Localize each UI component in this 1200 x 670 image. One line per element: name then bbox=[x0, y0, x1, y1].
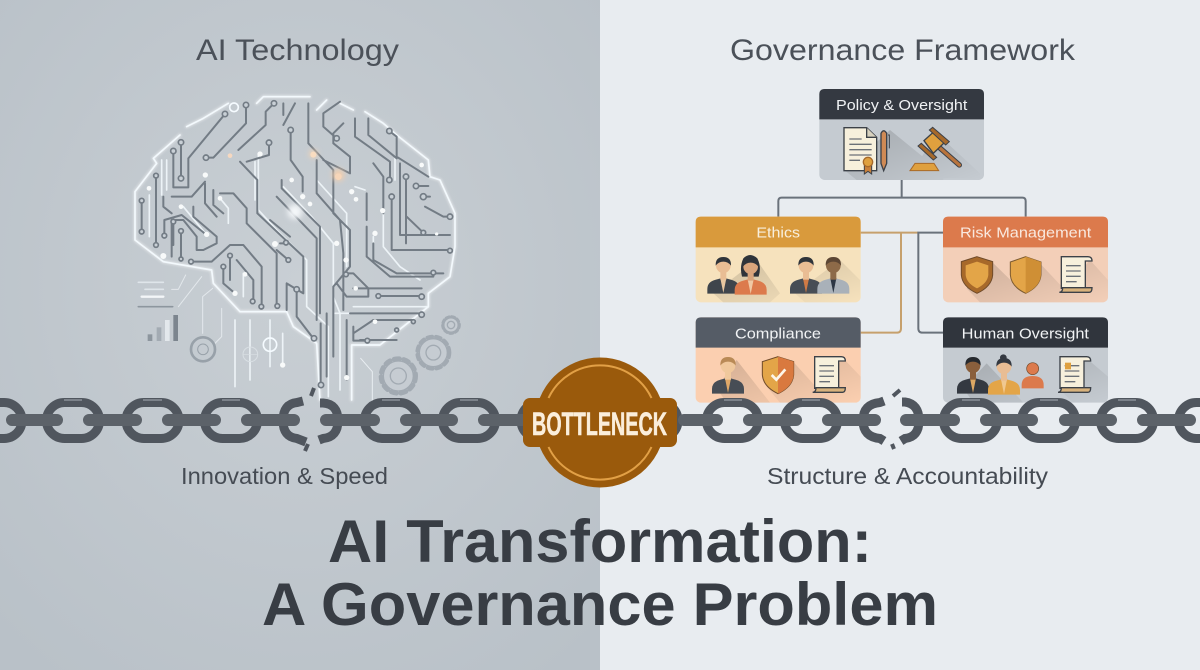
right background panel bbox=[600, 0, 1200, 670]
icon: shield solid bbox=[1010, 257, 1041, 293]
target circle icon bbox=[191, 337, 215, 361]
icon shadow bbox=[717, 358, 861, 403]
icon: shield outlined bbox=[961, 257, 993, 293]
icon: gavel bbox=[910, 127, 959, 171]
brain outline glow bbox=[135, 97, 455, 400]
governance org chart bbox=[696, 89, 1108, 403]
icon: pen bbox=[881, 131, 889, 171]
bright nodes bbox=[147, 151, 438, 380]
white light traces bbox=[149, 155, 428, 397]
caption: Structure & Accountability: Structure & Accountability bbox=[767, 463, 1049, 489]
gear icons bbox=[361, 317, 459, 400]
box: Ethics: Ethics bbox=[756, 226, 800, 242]
badge label: BOTTLENECK bbox=[532, 406, 667, 442]
icon: person in suit bbox=[712, 357, 744, 394]
icon: shield with check bbox=[762, 357, 794, 394]
caption: Innovation & Speed: Innovation & Speed bbox=[181, 463, 388, 489]
box: Human Oversight: Human Oversight bbox=[962, 326, 1089, 342]
broken link left bbox=[283, 388, 338, 451]
badge circle bbox=[535, 358, 665, 488]
broken link right bbox=[863, 390, 919, 449]
data lines icon bbox=[138, 275, 222, 345]
icon: scroll bbox=[813, 357, 845, 392]
small bar chart icon bbox=[148, 315, 178, 341]
connector lines bbox=[778, 180, 1026, 333]
dark circuit traces bbox=[142, 102, 450, 385]
box: Policy & Oversight bbox=[819, 89, 984, 180]
icon: profile scroll bbox=[1058, 357, 1091, 392]
box: Human Oversight bbox=[943, 317, 1108, 403]
box: Compliance: Compliance bbox=[735, 326, 821, 342]
main title bbox=[262, 508, 938, 638]
box: Compliance bbox=[696, 317, 861, 403]
heading: AI Technology: AI Technology bbox=[196, 34, 399, 67]
icon shadow bbox=[967, 260, 1108, 302]
box: Risk Management bbox=[943, 217, 1108, 302]
chain links bbox=[0, 402, 1200, 438]
icon shadow bbox=[845, 130, 980, 180]
chain bars bbox=[12, 414, 1190, 426]
left background panel bbox=[0, 0, 600, 670]
icon shadow bbox=[713, 260, 860, 302]
icon: scroll bbox=[1059, 257, 1092, 292]
circuit nodes bbox=[139, 101, 453, 388]
title line 1: AI Transformation: bbox=[328, 508, 872, 575]
box: Risk Management: Risk Management bbox=[960, 226, 1091, 242]
brain outline bbox=[135, 97, 455, 400]
box: Ethics bbox=[696, 217, 861, 302]
circuit brain illustration bbox=[135, 97, 459, 400]
glowing spots bbox=[288, 150, 344, 219]
top white ring bbox=[230, 103, 238, 112]
icon: three people bbox=[957, 354, 1044, 395]
badge band bbox=[523, 398, 677, 447]
link highlights bbox=[64, 399, 1136, 401]
icon: two men bbox=[790, 257, 849, 294]
bottleneck badge bbox=[523, 358, 677, 488]
chain bbox=[0, 388, 1200, 451]
box: Policy & Oversight: Policy & Oversight bbox=[836, 98, 967, 114]
icon: certificate document bbox=[844, 128, 877, 174]
heading: Governance Framework: Governance Framework bbox=[730, 34, 1076, 67]
badge ring arcs bbox=[548, 365, 652, 480]
title line 2: A Governance Problem bbox=[262, 571, 938, 638]
globe and ring icons bbox=[243, 338, 277, 362]
icon shadow bbox=[963, 358, 1108, 403]
icon: two people bbox=[707, 255, 767, 295]
